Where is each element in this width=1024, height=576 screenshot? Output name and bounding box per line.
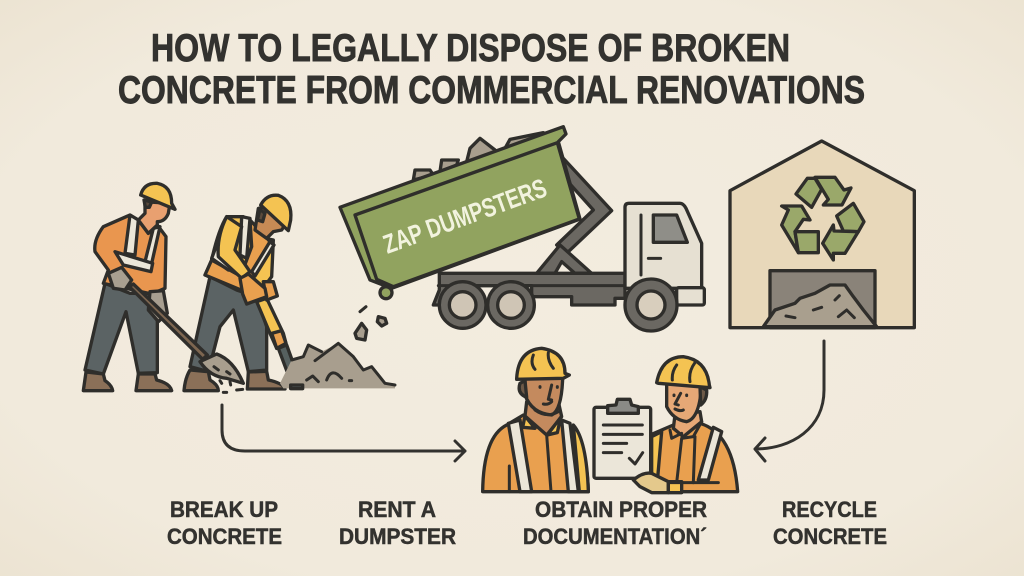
concrete rubble pile xyxy=(280,343,395,389)
truck wheels xyxy=(439,279,677,331)
label: rent a dumpster: DUMPSTER xyxy=(339,524,456,549)
label: recycle concrete: RECYCLE xyxy=(782,497,877,522)
label: break up concrete: BREAK UP xyxy=(170,497,278,522)
building xyxy=(730,141,914,328)
label: recycle concrete: CONCRETE xyxy=(773,524,887,549)
inspector right xyxy=(650,357,738,492)
label: obtain proper documentation: OBTAIN PROPER xyxy=(535,497,707,522)
recycle symbol xyxy=(782,177,864,260)
illustration: workers breaking up concrete xyxy=(83,183,395,392)
arrow: recycling to documentation xyxy=(755,341,824,461)
title: HOW TO LEGALLY DISPOSE OF BROKEN xyxy=(151,27,790,70)
label: break up concrete: CONCRETE xyxy=(167,524,282,549)
falling concrete debris xyxy=(355,307,387,340)
truck chassis xyxy=(433,273,625,305)
label: obtain proper documentation xyxy=(523,497,707,549)
illustration: roll-off truck with dumpster xyxy=(340,127,704,331)
illustration: inspectors with documentation xyxy=(483,348,738,493)
concrete load xyxy=(413,133,547,180)
label: rent a dumpster: RENT A xyxy=(358,497,436,522)
green dumpster xyxy=(340,127,580,299)
clipboard with checklist xyxy=(594,399,651,478)
worker with shovel xyxy=(83,183,175,391)
hoist arm xyxy=(537,158,612,273)
title xyxy=(118,27,865,112)
dumpster brand text: ZAP DUMPSTERS xyxy=(379,173,551,260)
shovel xyxy=(129,284,243,392)
truck cab xyxy=(625,203,704,305)
label: rent a dumpster xyxy=(339,497,456,549)
recycled concrete pile xyxy=(763,285,877,327)
label: break up concrete xyxy=(167,497,282,549)
inspector left xyxy=(483,348,588,492)
label: obtain proper documentation: DOCUMENTATION´ xyxy=(523,524,707,549)
gloved hand xyxy=(633,473,718,493)
label: recycle concrete xyxy=(773,497,887,549)
worker with jackhammer xyxy=(184,195,302,391)
bay opening xyxy=(770,271,875,328)
illustration: recycling facility xyxy=(730,141,914,328)
arrow: concrete to documentation xyxy=(222,405,465,461)
title: CONCRETE FROM COMMERCIAL RENOVATIONS xyxy=(118,69,865,112)
